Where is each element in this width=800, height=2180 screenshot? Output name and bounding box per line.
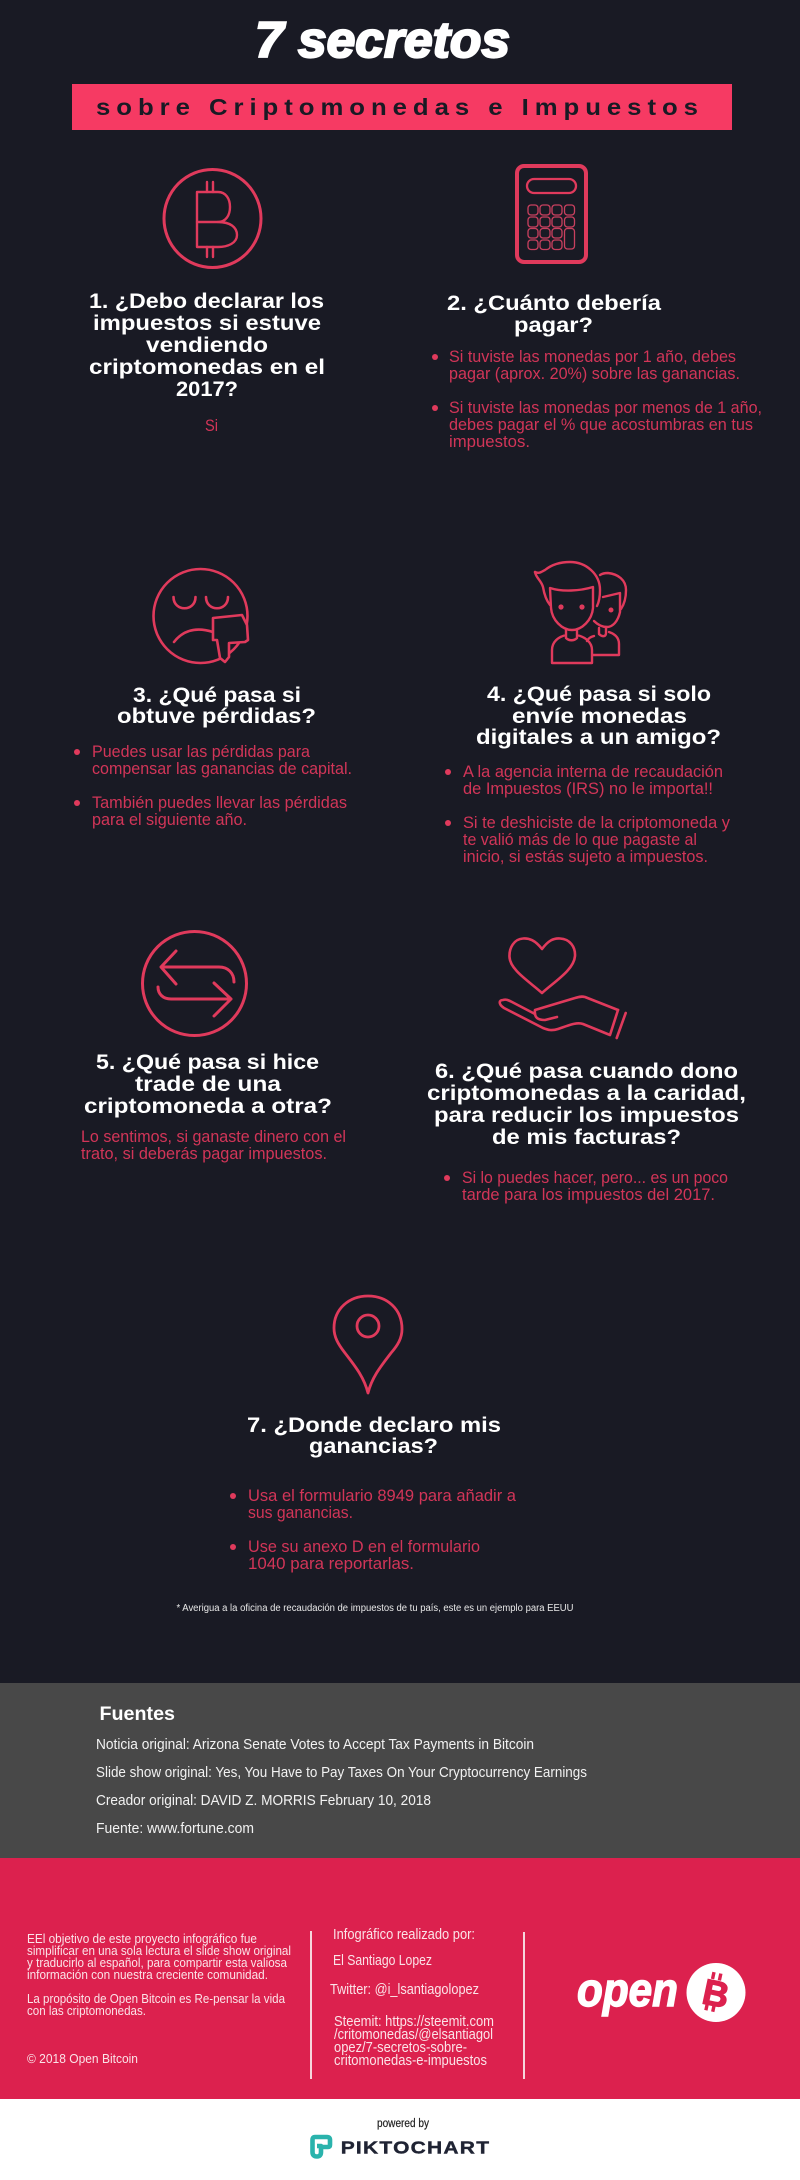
bullet list: question 4: de Impuestos (IRS) no le importa!! [463, 779, 713, 798]
icon: two people [535, 562, 626, 663]
heading: question 6: de mis facturas? [492, 1126, 681, 1149]
bullet list: question 4: inicio, si estás sujeto a impuestos. [463, 847, 708, 866]
heading: question 7: 7. ¿Donde declaro mis [247, 1414, 501, 1437]
answer: question 1: Si [205, 416, 218, 435]
heading: question 2 [447, 292, 661, 337]
source list: Slide show original: Yes, You Have to Pay Taxes On Your Cryptocurrency Earnings [96, 1765, 587, 1781]
text block: author credits [330, 1927, 494, 2069]
heading: question 4: 4. ¿Qué pasa si solo [487, 683, 711, 706]
text block: author credits: Steemit: https://steemit.com [334, 2014, 494, 2030]
text block: author credits: opez/7-secretos-sobre- [334, 2040, 467, 2056]
logo: Piktochart: PIKTOCHART [341, 2139, 489, 2158]
heading: question 1 [89, 290, 325, 401]
bullet list: question 6 [444, 1168, 728, 1204]
footnote: * Averigua a la oficina de recaudación de impuestos de tu país, este es un ejemplo para EEUU [176, 1603, 574, 1614]
answer: question 5 [81, 1127, 346, 1163]
heading: question 7: ganancias? [309, 1435, 438, 1458]
heading: question 1: 1. ¿Debo declarar los [89, 290, 324, 313]
icon: heart over hand [500, 938, 626, 1038]
heading: question 1: vendiendo [146, 334, 268, 357]
text block: project purpose: La propósito de Open Bitcoin es Re-pensar la vida [27, 1992, 285, 2006]
text block: author credits: Twitter: @i_lsantiagolopez [330, 1982, 479, 1998]
logo: Open Bitcoin [577, 1963, 746, 2022]
heading: question 3: 3. ¿Qué pasa si [133, 684, 301, 707]
panel: question 4 [445, 562, 731, 866]
icon: bitcoin coin [164, 170, 261, 268]
text block: author credits: El Santiago Lopez [333, 1953, 432, 1969]
answer: question 5: trato, si deberás pagar impuestos. [81, 1144, 327, 1163]
text block: author credits: Infográfico realizado por: [333, 1927, 475, 1943]
heading: question 4: digitales a un amigo? [476, 726, 721, 749]
heading: question 6: 6. ¿Qué pasa cuando dono [435, 1060, 738, 1083]
logo: Open Bitcoin: open [577, 1963, 678, 2016]
panel: question 7 [230, 1296, 517, 1573]
heading: question 4 [476, 683, 721, 749]
bullet list: question 4 [445, 762, 731, 866]
source list: Noticia original: Arizona Senate Votes to Accept Tax Payments in Bitcoin [96, 1737, 534, 1753]
heading: question 3: obtuve pérdidas? [117, 705, 316, 728]
answer: question 5: Lo sentimos, si ganaste dinero con el [81, 1127, 346, 1146]
bullet list: question 4: te valió más de lo que pagaste al [463, 830, 697, 849]
heading: question 1: criptomonedas en el [89, 356, 325, 379]
bullet list: question 3: compensar las ganancias de capital. [92, 759, 352, 778]
text: powered by: powered by [377, 2118, 429, 2130]
heading: question 5: 5. ¿Qué pasa si hice [96, 1051, 319, 1074]
heading: question 5: criptomoneda a otra? [84, 1095, 332, 1118]
text block: author credits: /critomonedas/@elsantiagol [334, 2027, 493, 2043]
subtitle banner [72, 84, 732, 130]
logo: Open Bitcoin: B [699, 1971, 733, 2016]
text block: project purpose: EEl objetivo de este proyecto infográfico fue [27, 1932, 257, 1946]
text block: author credits: critomonedas-e-impuestos [334, 2053, 487, 2069]
bullet list: question 2 [432, 347, 762, 451]
bullet list: question 7 [230, 1486, 517, 1573]
heading: question 6: para reducir los impuestos [434, 1104, 739, 1127]
panel: sources [0, 1683, 800, 1858]
bullet list: question 4: Si te deshiciste de la criptomoneda y [463, 813, 731, 832]
heading: question 3 [117, 684, 316, 728]
icon: map pin [334, 1296, 402, 1393]
bullet list: question 4: A la agencia interna de recaudación [463, 762, 723, 781]
bullet list: question 7: Usa el formulario 8949 para añadir a [248, 1486, 517, 1505]
panel: question 2 [432, 166, 762, 451]
bullet list: question 3 [74, 742, 352, 829]
heading: question 1: impuestos si estuve [93, 312, 321, 335]
source list [96, 1737, 587, 1837]
text block: project purpose [27, 1932, 291, 2066]
bullet list: question 2: impuestos. [449, 432, 530, 451]
text block: project purpose: información con nuestra creciente comunidad. [27, 1968, 268, 1982]
panel: question 6 [427, 938, 746, 1204]
heading: question 7 [247, 1414, 501, 1458]
subtitle banner: sobre Criptomonedas e Impuestos [96, 95, 698, 121]
bullet list: question 3: También puedes llevar las pérdidas [92, 793, 347, 812]
bullet list: question 6: Si lo puedes hacer, pero... es un poco [462, 1168, 728, 1187]
heading: sources: Fuentes [100, 1704, 175, 1725]
title: 7 secretos [255, 12, 510, 68]
text block: project purpose: simplificar en una sola lectura el slide show original [27, 1944, 291, 1958]
icon: sad face with thumb down [154, 569, 248, 663]
text block: project purpose: © 2018 Open Bitcoin [27, 2052, 138, 2066]
bullet list: question 3: Puedes usar las pérdidas para [92, 742, 311, 761]
icon: swap arrows [142, 932, 246, 1036]
heading: question 2: 2. ¿Cuánto debería [447, 292, 661, 315]
source list: Creador original: DAVID Z. MORRIS February 10, 2018 [96, 1793, 431, 1809]
panel: question 3 [74, 569, 352, 829]
source list: Fuente: www.fortune.com [96, 1821, 254, 1837]
panel: question 5 [81, 932, 346, 1163]
bullet list: question 7: 1040 para reportarlas. [248, 1554, 414, 1573]
heading: question 6 [427, 1060, 746, 1149]
heading: question 4: envíe monedas [512, 705, 687, 728]
heading: question 5 [84, 1051, 332, 1118]
bullet list: question 7: sus ganancias. [248, 1503, 353, 1522]
bullet list: question 7: Use su anexo D en el formulario [248, 1537, 480, 1556]
heading: question 2: pagar? [514, 314, 593, 337]
panel: question 1 [89, 170, 325, 435]
icon: calculator [517, 166, 586, 262]
heading: question 5: trade de una [135, 1073, 281, 1096]
bullet list: question 2: pagar (aprox. 20%) sobre las ganancias. [449, 364, 740, 383]
bullet list: question 2: Si tuviste las monedas por menos de 1 año, [449, 398, 762, 417]
heading: question 6: criptomonedas a la caridad, [427, 1082, 746, 1105]
panel: footer credits [0, 1858, 800, 2099]
bullet list: question 2: debes pagar el % que acostumbras en tus [449, 415, 753, 434]
heading: question 1: 2017? [176, 378, 238, 401]
bullet list: question 2: Si tuviste las monedas por 1 año, debes [449, 347, 736, 366]
text block: project purpose: con las criptomonedas. [27, 2004, 146, 2018]
panel: powered by [0, 2099, 800, 2180]
text block: project purpose: y traducirlo al español, para compartir esta valiosa [27, 1956, 287, 1970]
bullet list: question 3: para el siguiente año. [92, 810, 247, 829]
bullet list: question 6: tarde para los impuestos del 2017. [462, 1185, 715, 1204]
